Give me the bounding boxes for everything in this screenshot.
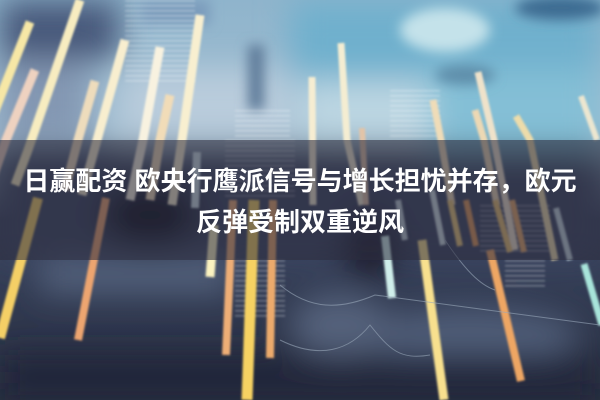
title: 反弹受制双重逆风 xyxy=(196,207,404,237)
title xyxy=(23,166,577,237)
curve lines xyxy=(280,240,600,356)
title band xyxy=(0,140,600,260)
data stripes xyxy=(125,0,550,320)
title: 日赢配资 欧央行鹰派信号与增长担忧并存，欧元 xyxy=(23,166,577,196)
